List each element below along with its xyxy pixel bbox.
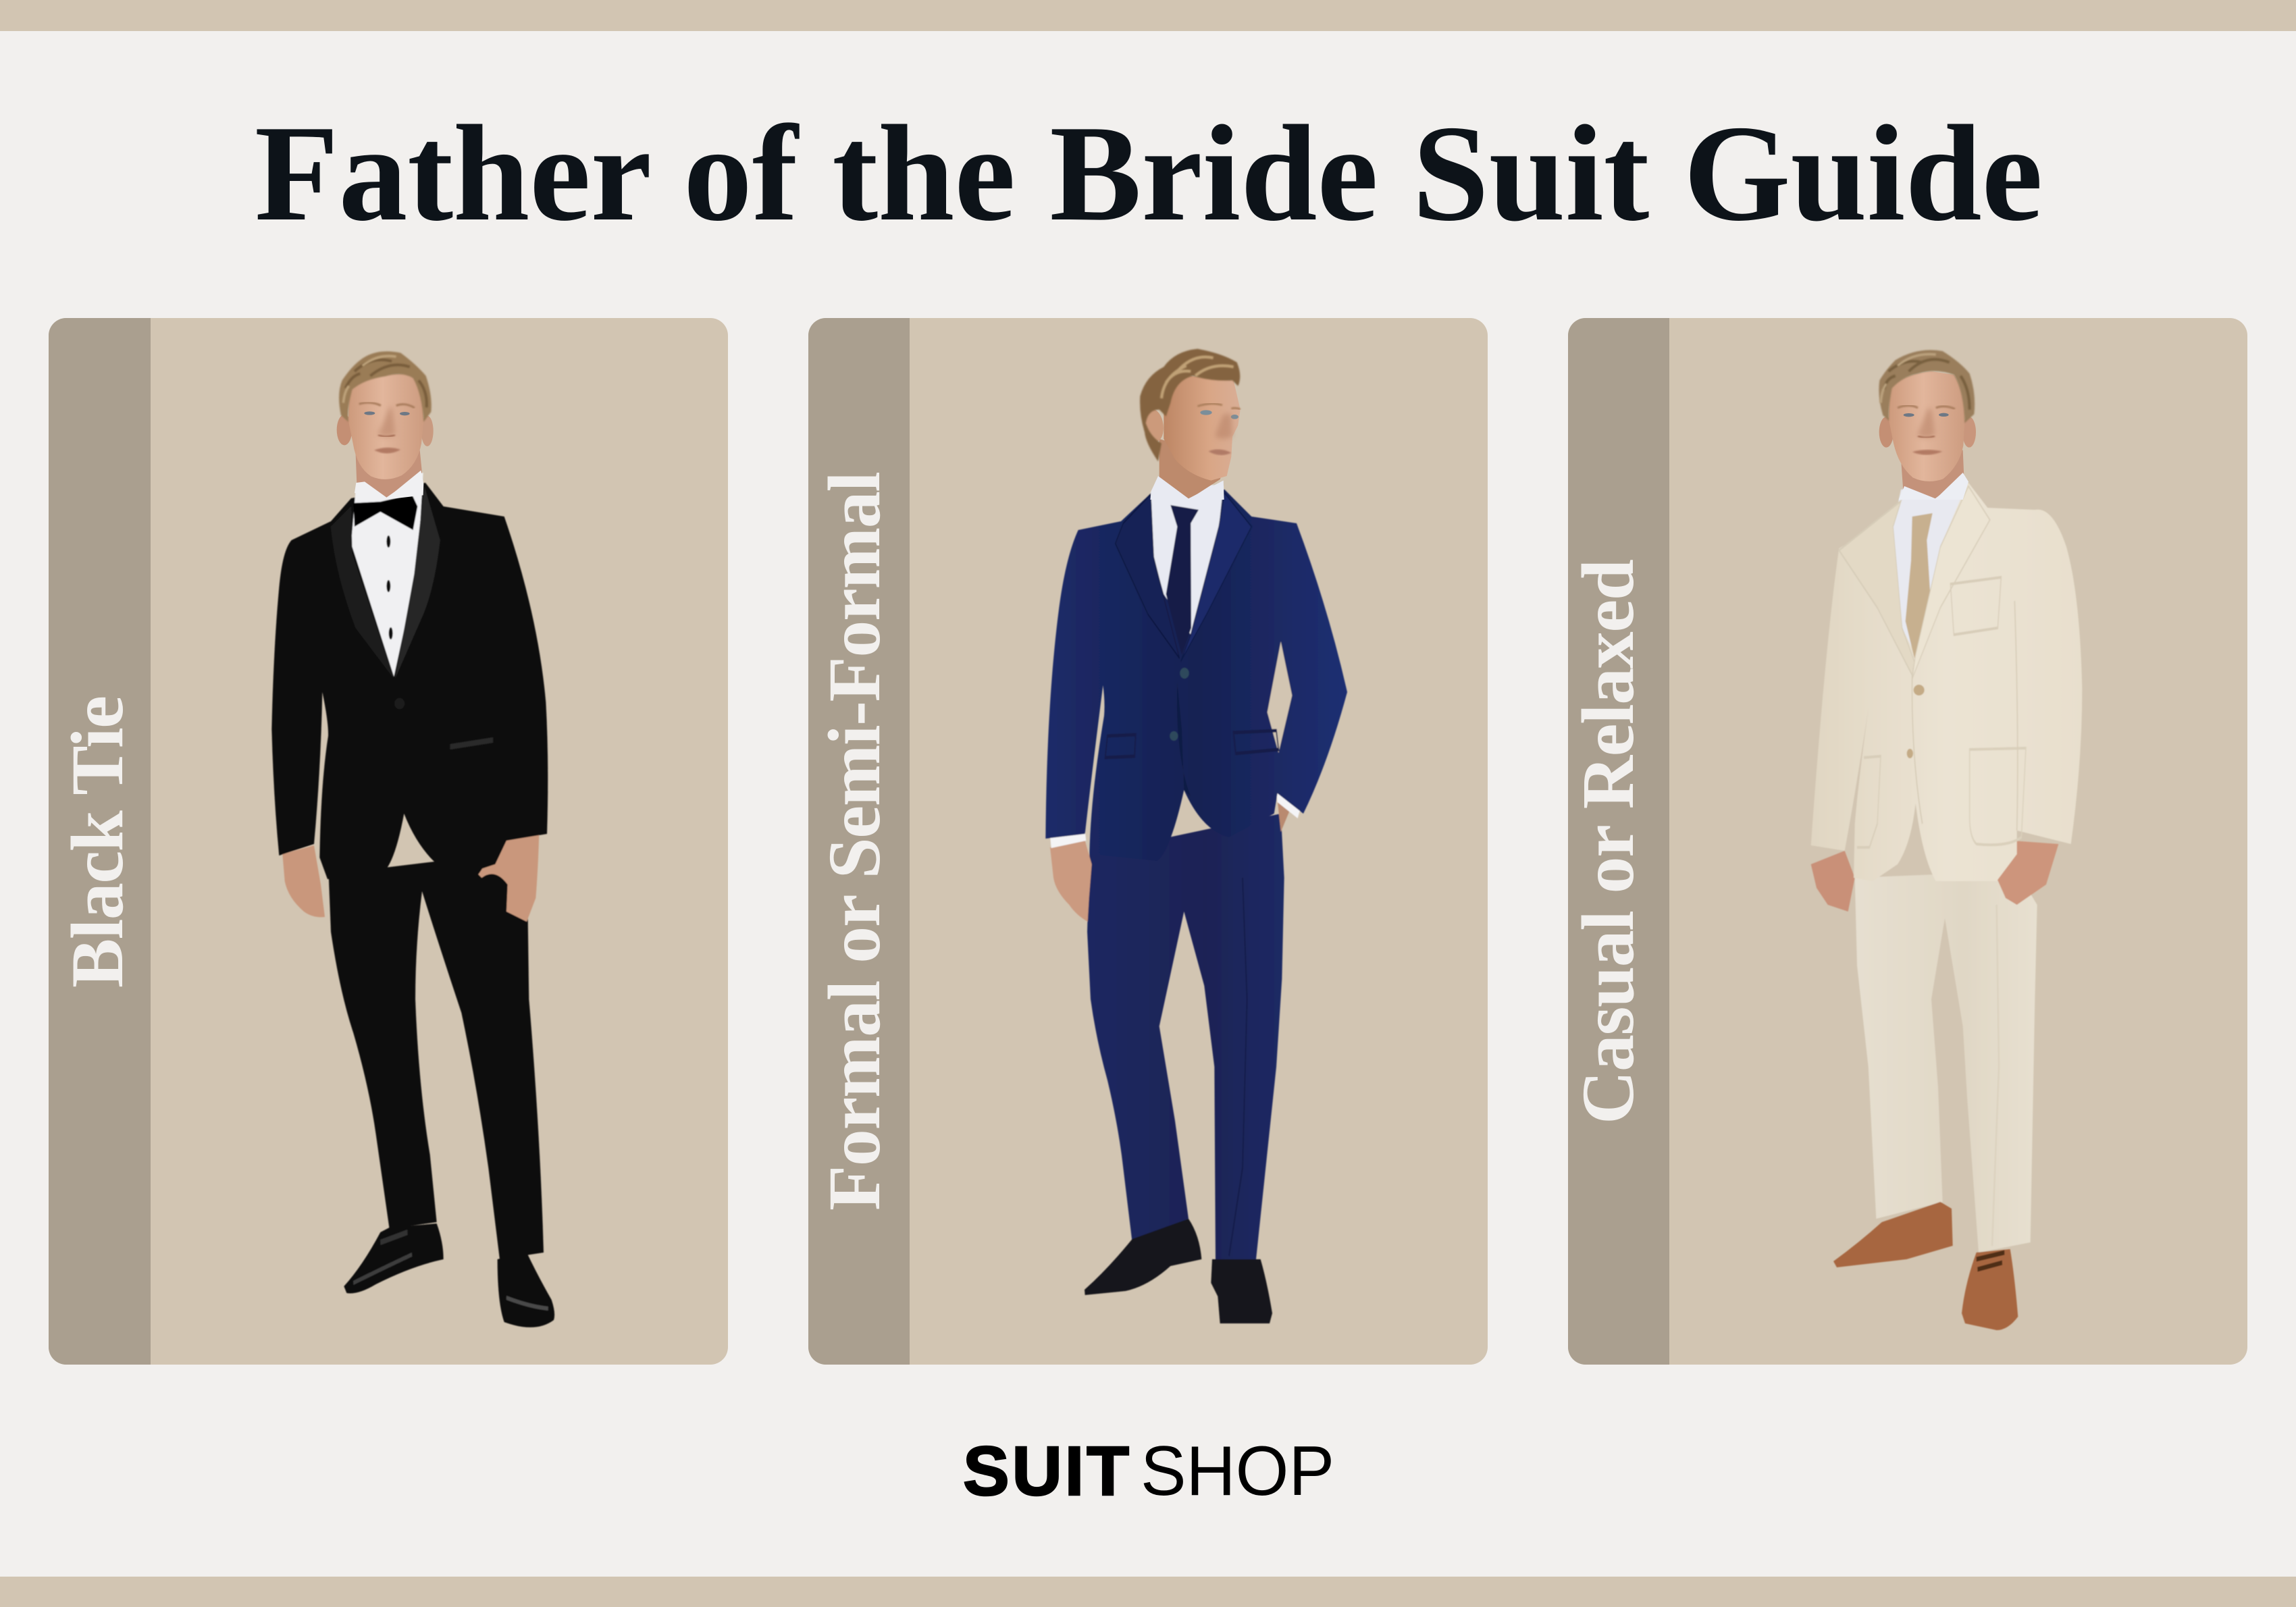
panel background	[808, 318, 1488, 1365]
title: Father of the Bride Suit Guide	[255, 97, 2043, 250]
logo word: SHOP: SHOP	[1141, 1432, 1334, 1510]
sidebar	[49, 318, 151, 1365]
label: Black Tie: Black Tie	[56, 695, 138, 988]
logo: SUITSHOP	[963, 1432, 1334, 1510]
head	[337, 351, 434, 500]
figure: man in black tuxedo	[271, 351, 554, 1327]
panel: Casual or Relaxed	[1567, 318, 2247, 1365]
logo word: SUIT: SUIT	[963, 1432, 1129, 1510]
sidebar	[1568, 318, 1669, 1365]
panel background	[1568, 318, 2247, 1365]
figure: man in navy suit	[1045, 349, 1347, 1323]
figure: man in cream linen suit	[1811, 350, 2082, 1330]
label: Formal or Semi-Formal: Formal or Semi-Formal	[813, 471, 895, 1211]
sidebar	[808, 318, 910, 1365]
top band	[0, 0, 2296, 31]
panel background	[49, 318, 728, 1365]
panel: Formal or Semi-Formal	[808, 318, 1488, 1365]
bottom band	[0, 1577, 2296, 1607]
head	[1879, 350, 1976, 500]
label: Casual or Relaxed: Casual or Relaxed	[1567, 559, 1649, 1124]
head	[1140, 349, 1241, 500]
panel: Black Tie	[49, 318, 728, 1365]
